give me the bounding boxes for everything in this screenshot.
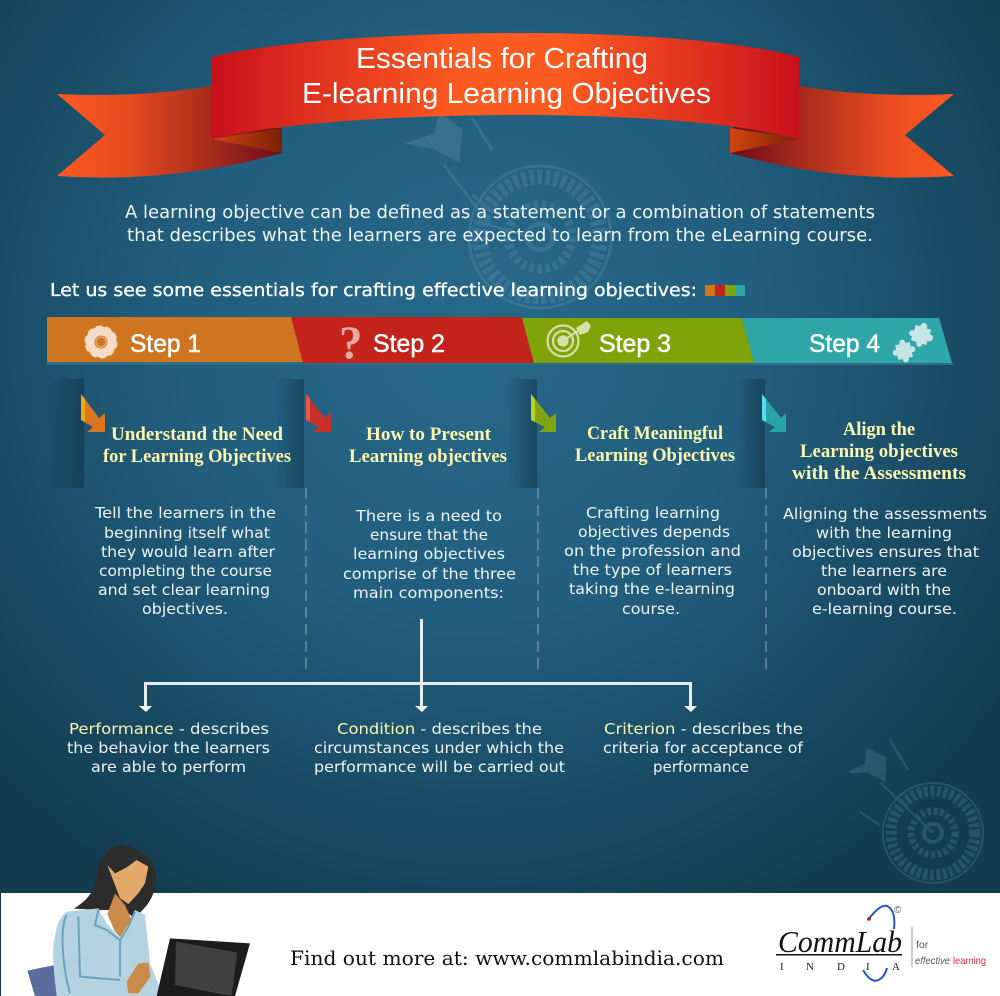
steps bar xyxy=(47,317,953,369)
logo India: I xyxy=(866,961,870,973)
hands xyxy=(127,963,151,993)
body text: and set clear learning xyxy=(98,581,270,599)
intro paragraph: that describes what the learners are expected to learn from the eLearning course. xyxy=(127,225,873,246)
body text xyxy=(343,507,516,602)
step labels: Step 4 xyxy=(809,330,880,358)
heading xyxy=(575,423,735,466)
ribbon left fold xyxy=(212,128,282,153)
body text: learning objectives xyxy=(353,545,505,563)
icon: teal fold arrow xyxy=(762,394,786,432)
ribbon main band xyxy=(212,33,799,139)
body text: objectives depends xyxy=(578,523,730,541)
column 3 xyxy=(531,394,741,618)
icon: orange fold arrow xyxy=(81,394,105,432)
step 1 segment xyxy=(47,317,303,362)
logo India: A xyxy=(892,961,900,973)
component: criterion xyxy=(603,720,804,776)
heading: Align the xyxy=(843,419,915,440)
step 2 segment xyxy=(291,317,534,363)
logo: CommLab India xyxy=(776,905,986,981)
heading: for Learning Objectives xyxy=(103,446,291,467)
step labels: Step 1 xyxy=(130,330,201,358)
body text xyxy=(564,504,741,618)
body text: completing the course xyxy=(99,562,272,580)
logo tagline: effective xyxy=(915,955,950,967)
logo rule xyxy=(776,954,902,956)
component: criterion: criteria for acceptance of xyxy=(603,739,804,757)
component: condition: circumstances under which the xyxy=(314,739,564,757)
step labels xyxy=(130,330,880,358)
component: performance: Performance - describes xyxy=(69,720,269,738)
tree connector with three arrows xyxy=(139,619,697,712)
heading: Learning objectives xyxy=(800,441,958,462)
logo tagline: for xyxy=(916,939,929,951)
panel shadow bands xyxy=(47,379,765,488)
body text: comprise of the three xyxy=(343,565,516,583)
logo copyright: © xyxy=(894,905,902,916)
face xyxy=(107,860,148,904)
heading: How to Present xyxy=(366,424,492,445)
logo India: I xyxy=(780,961,784,973)
logo India: D xyxy=(837,961,845,973)
body text: Crafting learning xyxy=(586,504,720,522)
body text: objectives ensures that xyxy=(792,543,979,561)
body text: main components: xyxy=(353,584,504,602)
body text: taking the e-learning xyxy=(569,580,735,598)
column 1 xyxy=(81,394,291,618)
logo divider xyxy=(912,927,913,967)
body text: the learners are xyxy=(821,562,947,580)
heading xyxy=(792,419,966,484)
body text: Aligning the assessments xyxy=(783,505,987,523)
icon: target and dart xyxy=(548,321,591,356)
body text: they would learn after xyxy=(101,543,276,561)
ribbon left tail xyxy=(57,86,282,178)
body text: on the profession and xyxy=(564,542,741,560)
body text: beginning itself what xyxy=(104,524,270,542)
component: performance: are able to perform xyxy=(91,758,246,776)
step 3 segment xyxy=(522,318,754,363)
heading xyxy=(103,424,291,467)
body text: e-learning course. xyxy=(812,600,957,618)
heading xyxy=(349,424,507,467)
body text xyxy=(94,504,276,618)
component: condition: performance will be carried out xyxy=(314,758,565,776)
watermark: dart and target centre xyxy=(412,115,611,308)
logo arcs xyxy=(868,906,894,929)
icon: gear xyxy=(86,328,116,356)
step labels: Step 3 xyxy=(599,330,671,358)
body text: course. xyxy=(622,600,680,618)
component: condition: Condition - describes the xyxy=(337,720,542,738)
title text: Essentials for Crafting xyxy=(356,43,648,75)
step 4 segment xyxy=(742,318,952,363)
column 2 xyxy=(306,394,516,602)
logo wordmark: CommLab xyxy=(778,924,902,959)
illustration: woman at computer xyxy=(27,845,250,996)
dashed dividers xyxy=(306,488,766,672)
body text: onboard with the xyxy=(817,581,951,599)
component: performance xyxy=(67,720,270,776)
body text: objectives. xyxy=(142,600,228,618)
blouse folds xyxy=(63,910,135,993)
intro paragraph: A learning objective can be defined as a statement or a combination of statements xyxy=(125,202,875,223)
logo tagline: learning xyxy=(953,955,986,967)
logo dot xyxy=(867,917,871,921)
heading: Learning objectives xyxy=(349,446,507,467)
title text: E-learning Learning Objectives xyxy=(302,78,711,110)
heading: Craft Meaningful xyxy=(587,423,723,444)
body text: Tell the learners in the xyxy=(94,504,276,522)
body text: the type of learners xyxy=(573,561,732,579)
column 4 xyxy=(762,394,987,618)
hair xyxy=(74,845,156,918)
lead-in sentence: Let us see some essentials for crafting effective learning objectives: xyxy=(50,280,697,301)
blouse xyxy=(53,908,159,996)
ribbon right fold xyxy=(730,128,799,153)
colour key xyxy=(705,285,745,296)
component: performance: the behavior the learners xyxy=(67,739,270,757)
intro paragraph xyxy=(125,202,875,246)
component: criterion: Criterion - describes the xyxy=(604,720,803,738)
icon: red fold arrow xyxy=(306,394,331,432)
heading: Learning Objectives xyxy=(575,445,735,466)
icon: question mark: ? xyxy=(339,317,362,369)
watermark: dart and target lower right xyxy=(850,740,983,883)
body text: ensure that the xyxy=(370,526,488,544)
monitor xyxy=(157,938,250,996)
chair xyxy=(27,965,58,996)
heading: with the Assessments xyxy=(792,463,966,484)
title ribbon xyxy=(57,33,954,178)
bar under-strip xyxy=(47,362,953,365)
component: condition xyxy=(314,720,565,776)
ribbon right tail xyxy=(730,86,954,178)
body text: There is a need to xyxy=(355,507,502,525)
body text: with the learning xyxy=(816,524,952,542)
step labels: Step 2 xyxy=(373,330,445,358)
footer call to action: Find out more at: www.commlabindia.com xyxy=(290,946,724,970)
icon: green fold arrow xyxy=(531,394,556,432)
body text xyxy=(783,505,987,618)
logo India: N xyxy=(806,961,814,973)
icon: puzzle pieces xyxy=(890,319,937,365)
heading: Understand the Need xyxy=(111,424,283,445)
footer band xyxy=(1,893,1000,996)
component: criterion: performance xyxy=(653,758,749,776)
neck xyxy=(107,893,131,937)
monitor screen xyxy=(175,942,237,996)
